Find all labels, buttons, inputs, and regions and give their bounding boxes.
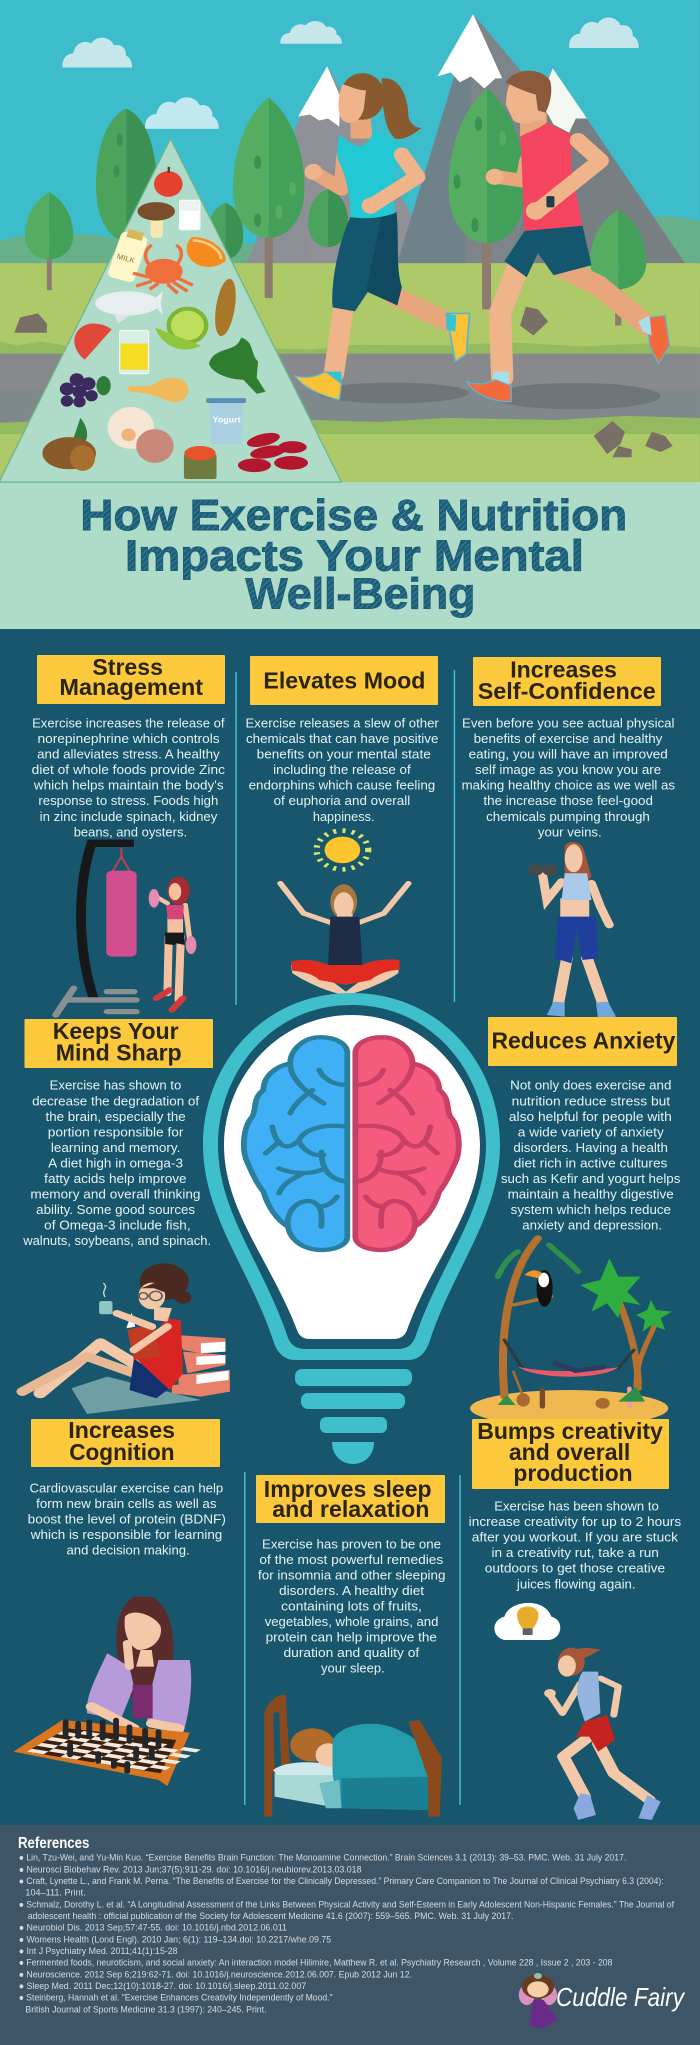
brain [244, 1037, 459, 1250]
body text: reduces anxiety: Not only does exercise and [510, 1078, 671, 1093]
panel: reduces anxiety [470, 1017, 681, 1427]
body text: keeps your mind sharp [22, 1078, 211, 1248]
body text: keeps your mind sharp: memory and overall thinking [30, 1187, 201, 1202]
bulb base [295, 1369, 412, 1464]
body text: improves sleep: disorders. A healthy diet [279, 1583, 424, 1598]
body text: increases self-confidence: the increase those feel-good [483, 793, 653, 808]
heading: bumps creativity: and overall [509, 1439, 630, 1465]
panel: increases cognition [13, 1417, 226, 1786]
body text: improves sleep: protein can help improve the [266, 1630, 437, 1645]
rocks [14, 307, 673, 457]
spinach [209, 338, 266, 394]
body text: increases cognition: form new brain cells as well as [36, 1496, 217, 1511]
left hemisphere [244, 1037, 347, 1250]
body text: reduces anxiety [501, 1078, 681, 1233]
tomato wedge [74, 323, 112, 360]
body text: reduces anxiety: anxiety and depression. [522, 1218, 662, 1233]
references list: ● Int J Psychiatry Med. 2011;41(1):15-28 [19, 1946, 178, 1957]
body text: improves sleep [258, 1536, 446, 1676]
body text: reduces anxiety: a wide variety of anxiety [518, 1124, 664, 1139]
body text: stress management: beans, and oysters. [74, 824, 187, 839]
mountains [241, 14, 699, 285]
body text: improves sleep: of the most powerful remedies [259, 1552, 444, 1567]
references list: 104–111. Print. [25, 1888, 86, 1899]
body text: keeps your mind sharp: the brain, especially the [46, 1109, 186, 1124]
heading: bumps creativity: Bumps creativity [477, 1418, 663, 1444]
body text: increases cognition: boost the level of protein (BDNF) [28, 1512, 226, 1526]
body text: increases self-confidence [462, 715, 675, 839]
body text: bumps creativity: in a creativity rut, take a run [492, 1545, 659, 1560]
references list: ● Lin, Tzu-Wei, and Yu-Min Kuo. “Exercise Benefits Brain Function: The Monoamine Connection.” Brain Sciences 3.1 (2013): 39–53. PMC. Web. 31 July 2017. [19, 1853, 626, 1864]
road [0, 342, 700, 434]
body text: keeps your mind sharp: walnuts, soybeans, and spinach. [22, 1233, 211, 1248]
heading: reduces anxiety: Reduces Anxiety [492, 1028, 675, 1054]
meadow [0, 263, 700, 482]
runner: woman [295, 73, 470, 400]
body text: keeps your mind sharp: portion responsible for [48, 1124, 184, 1139]
body text: bumps creativity: increase creativity for up to 2 hours [469, 1514, 682, 1529]
title band [0, 139, 700, 629]
body text: elevates mood: endorphins which cause feeling [249, 778, 435, 793]
sky [0, 0, 700, 289]
heading: increases self-confidence [473, 657, 661, 706]
references list: British Journal of Sports Medicine 31.3 (1997): 240–245. Print. [25, 2004, 267, 2015]
clouds [62, 18, 639, 129]
runner: man [466, 71, 670, 402]
body text: increases cognition: Cardiovascular exercise can help [30, 1480, 223, 1495]
body text: elevates mood: of euphoria and overall [274, 793, 410, 808]
walnut [42, 418, 96, 471]
panel: improves sleep and relaxation [256, 1475, 446, 1817]
body text: bumps creativity [469, 1498, 682, 1591]
heading: increases self-confidence: Increases [510, 657, 617, 683]
body text: reduces anxiety: disorders. Having a health [513, 1140, 668, 1155]
references list: ● Fermented foods, neuroticism, and social anxiety: An interaction model Hilimire, Matthew R. et al. Psychiatry Research , Volume 228 , Issue 2 , 203 - 208 [19, 1958, 612, 1969]
icon: yoga woman [280, 883, 408, 995]
heading: keeps your mind sharp [24, 1018, 213, 1068]
body text: stress management: in zinc include spinach, kidney [40, 809, 218, 824]
references background [0, 1825, 700, 2045]
body text: keeps your mind sharp: Exercise has shown to [50, 1078, 181, 1093]
milk bottle [107, 227, 150, 283]
body text: elevates mood: including the release of [273, 762, 411, 777]
body text: bumps creativity: juices flowing again. [516, 1576, 636, 1591]
panel: increases self-confidence [462, 657, 675, 1019]
body text: stress management: norepinephrine which controls [38, 731, 220, 746]
body text: increases self-confidence: your veins. [538, 824, 602, 839]
body text: elevates mood: benefits on your mental state [257, 746, 431, 762]
heading: elevates mood: Elevates Mood [263, 667, 425, 693]
references list: ● Neurosci Biobehav Rev. 2013 Jun;37(5):911-29. doi: 10.1016/j.neubiorev.2013.03.018 [19, 1864, 361, 1875]
references list [19, 1853, 674, 2015]
panel: stress management [32, 654, 225, 1015]
central light bulb with brain [203, 993, 500, 1464]
title [80, 491, 627, 619]
heading: elevates mood [250, 656, 438, 705]
logo: cuddle fairy [519, 1973, 686, 2028]
body text: reduces anxiety: also helpful for people with [509, 1109, 672, 1124]
heading: improves sleep: Improves sleep [264, 1476, 432, 1502]
icon: woman running [544, 1648, 661, 1820]
bulb outline [203, 993, 500, 1360]
icon: punching bag and boxer [56, 843, 196, 1015]
milk bottle: MILK [115, 252, 136, 265]
body text: increases self-confidence: Even before you see actual physical [462, 715, 675, 730]
body text: improves sleep: containing lots of fruits, [281, 1598, 422, 1614]
juice glass [120, 330, 149, 374]
title: Well-Being [246, 570, 475, 619]
heading: increases self-confidence: Self-Confidence [478, 678, 656, 704]
body text: increases cognition: which is responsible for learning [30, 1527, 222, 1542]
body text: elevates mood [246, 715, 439, 824]
nut pod [212, 278, 239, 337]
body text: bumps creativity: after you workout. If you are stuck [472, 1530, 678, 1544]
body text: reduces anxiety: system which helps reduce [511, 1202, 671, 1217]
references list: ● Neuroscience. 2012 Sep 6;219:62-71. doi: 10.1016/j.neuroscience.2012.06.007. Epub 2012 Jun 12. [19, 1969, 412, 1980]
panel: keeps your mind sharp [22, 1018, 230, 1414]
apple [154, 167, 183, 197]
body text: keeps your mind sharp: decrease the degradation of [32, 1093, 199, 1108]
heading: bumps creativity: production [513, 1460, 633, 1486]
body text: increases self-confidence: self image as you know you are [475, 762, 661, 777]
body text: stress management: response to stress. Foods high [38, 793, 218, 808]
panel: bumps creativity [469, 1418, 682, 1820]
heading: improves sleep [256, 1475, 445, 1523]
body text: reduces anxiety: maintain a healthy digestive [508, 1187, 674, 1202]
wordmark: Cuddle Fairy [556, 1982, 686, 2012]
body text: improves sleep: vegetables, whole grains, and [265, 1614, 438, 1629]
body text: reduces anxiety: nutrition reduce stress but [512, 1093, 670, 1108]
body text: improves sleep: duration and quality of [284, 1645, 420, 1660]
body text: reduces anxiety: diet rich in active cultures [514, 1156, 668, 1170]
yogurt cup [206, 398, 246, 444]
body text: bumps creativity: Exercise has been shown to [494, 1498, 659, 1513]
yogurt cup: Yogurt [212, 415, 241, 425]
body text: stress management [32, 715, 225, 839]
references list: ● Sleep Med. 2011 Dec;12(10):1018-27. doi: 10.1016/j.sleep.2011.02.007 [19, 1981, 306, 1992]
grapes [60, 373, 111, 407]
heading: stress management: Management [59, 674, 203, 700]
body text: improves sleep: for insomnia and other sleeping [258, 1567, 446, 1582]
food pyramid [0, 139, 341, 482]
body text: keeps your mind sharp: learning and memory. [51, 1140, 180, 1155]
heading: bumps creativity [472, 1418, 669, 1489]
heading: keeps your mind sharp: Keeps Your [53, 1018, 179, 1044]
icon: woman lifting dumbbell [528, 842, 616, 1019]
references list: ● Neurobiol Dis. 2013 Sep;57:47-55. doi: 10.1016/j.nbd.2012.06.011 [19, 1923, 287, 1934]
heading: increases cognition: Increases [68, 1417, 175, 1443]
panel: elevates mood [246, 656, 439, 995]
orange [187, 237, 226, 267]
heading: reduces anxiety [488, 1017, 677, 1066]
body text: increases self-confidence: chemicals pumping through [486, 809, 650, 824]
heading: stress management [37, 654, 225, 704]
body text: keeps your mind sharp: A diet high in omega-3 [48, 1156, 183, 1170]
icon: idea cloud with bulb [494, 1603, 560, 1640]
references list: ● Steinberg, Hannah et al. “Exercise Enhances Creativity Independently of Mood.” [19, 1993, 332, 2004]
body text: stress management: Exercise increases the release of [32, 715, 225, 730]
body text: elevates mood: Exercise releases a slew of other [246, 715, 439, 730]
body text: keeps your mind sharp: ability. Some good sources [36, 1202, 196, 1217]
icon: woman reading [22, 1263, 230, 1414]
hero scene [0, 0, 700, 482]
body text: stress management: which helps maintain the body's [33, 778, 224, 793]
glass of milk [179, 200, 200, 230]
body text: increases cognition: and decision making. [66, 1543, 190, 1558]
body text: improves sleep: Exercise has proven to be one [262, 1536, 441, 1551]
body text: reduces anxiety: such as Kefir and yogurt helps [501, 1171, 681, 1186]
fish [95, 291, 163, 323]
icon: fairy [519, 1973, 558, 2028]
pyramid triangle [0, 139, 341, 482]
heading: improves sleep: and relaxation [272, 1496, 429, 1522]
limes [155, 307, 208, 350]
title: How Exercise & Nutrition [80, 491, 627, 540]
body text: increases cognition [28, 1480, 226, 1558]
heading: stress management: Stress [92, 654, 163, 680]
panel: references [0, 1825, 700, 2045]
body text: bumps creativity: outdoors to get those creative [485, 1561, 665, 1576]
distant hills [0, 216, 700, 281]
references heading: References [18, 1835, 89, 1852]
heading: increases cognition [31, 1417, 220, 1467]
roe sushi [184, 446, 217, 479]
body text: increases self-confidence: making healthy choice as we well as [462, 778, 675, 793]
heading: keeps your mind sharp: Mind Sharp [56, 1040, 182, 1066]
icon: person sleeping in bed [264, 1695, 442, 1817]
right hemisphere [355, 1037, 459, 1250]
shells [108, 407, 174, 463]
references list: ● Womens Health (Lond Engl). 2010 Jan; 6(1): 119–134.doi: 10.2217/whe.09.75 [19, 1934, 331, 1945]
body text: elevates mood: chemicals that can have positive [246, 731, 438, 746]
icon: woman playing chess [13, 1597, 201, 1786]
body text: increases self-confidence: benefits of exercise and healthy [474, 731, 663, 746]
kidney beans [238, 430, 308, 472]
references list: adolescent health : official publication of the Society for Adolescent Medicine 41.6 (2007): 559–565. PMC. Web. 31 July 2017. [28, 1911, 513, 1922]
heading: increases cognition: Cognition [69, 1439, 175, 1465]
trees [25, 88, 646, 325]
body text: keeps your mind sharp: of Omega-3 include fish, [44, 1218, 191, 1233]
body text: elevates mood: happiness. [313, 809, 374, 824]
body text: increases self-confidence: eating, you will have an improved [469, 746, 668, 762]
column dividers [235, 670, 461, 1805]
icon: sun [316, 831, 368, 869]
icon: island hammock with toucan [470, 1238, 672, 1427]
crab [133, 245, 193, 293]
body text: stress management: and alleviates stress. A healthy [37, 746, 220, 762]
body text: stress management: diet of whole foods provide Zinc [32, 762, 225, 777]
body text: improves sleep: your sleep. [321, 1661, 385, 1676]
body text: keeps your mind sharp: fatty acids help improve [44, 1171, 187, 1186]
chicken leg [127, 378, 188, 402]
title: Impacts Your Mental [125, 532, 584, 580]
mushroom [137, 202, 175, 238]
